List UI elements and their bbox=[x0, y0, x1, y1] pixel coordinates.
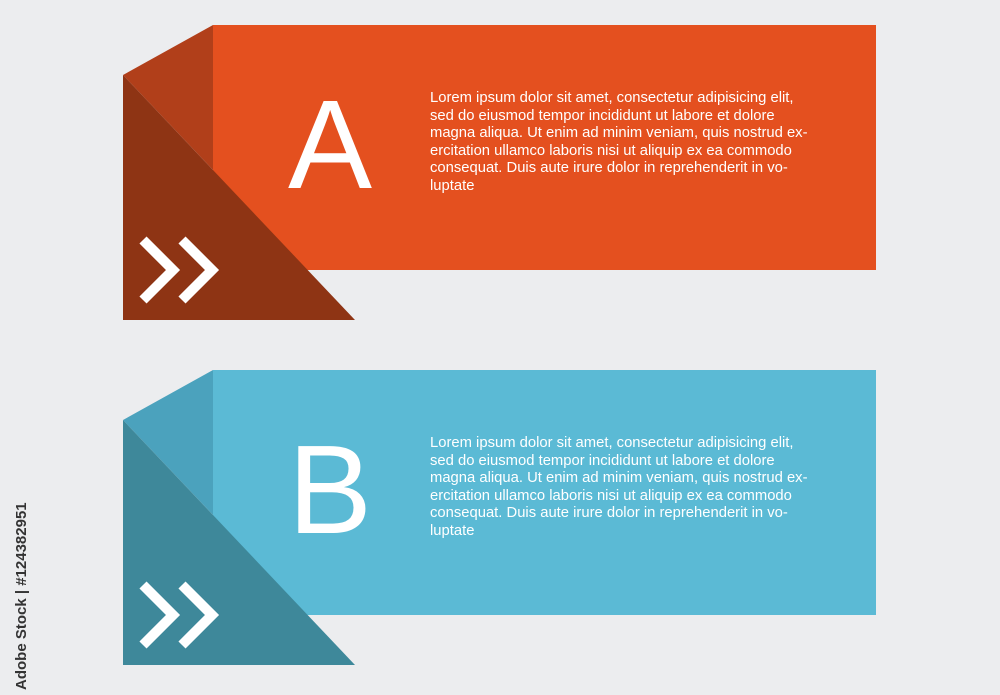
text A: Lorem ipsum dolor sit amet, consectetur adipisicing elit, bbox=[430, 90, 794, 106]
icon: chevrons A bbox=[143, 240, 212, 300]
text A: luptate bbox=[430, 178, 474, 194]
icon: chevrons B bbox=[143, 585, 212, 645]
dark triangle A bbox=[123, 75, 355, 320]
text A: magna aliqua. Ut enim ad minim veniam, quis nostrud ex- bbox=[430, 125, 808, 141]
banner A bbox=[123, 25, 876, 320]
text A bbox=[430, 90, 808, 194]
text B bbox=[430, 435, 808, 539]
letter A: A bbox=[288, 74, 372, 215]
text B: magna aliqua. Ut enim ad minim veniam, quis nostrud ex- bbox=[430, 470, 808, 486]
letter B: B bbox=[288, 419, 372, 560]
text B: ercitation ullamco laboris nisi ut aliquip ex ea commodo bbox=[430, 488, 792, 504]
text B: sed do eiusmod tempor incididunt ut labore et dolore bbox=[430, 453, 775, 469]
text B: luptate bbox=[430, 523, 474, 539]
fold flap B bbox=[123, 370, 213, 515]
watermark id: Adobe Stock | #124382951 bbox=[13, 502, 30, 690]
banner B bbox=[123, 370, 876, 665]
text B: Lorem ipsum dolor sit amet, consectetur adipisicing elit, bbox=[430, 435, 794, 451]
panel B body bbox=[213, 370, 876, 615]
dark triangle B bbox=[123, 420, 355, 665]
text A: ercitation ullamco laboris nisi ut aliquip ex ea commodo bbox=[430, 143, 792, 159]
fold flap A bbox=[123, 25, 213, 170]
panel A body bbox=[213, 25, 876, 270]
text B: consequat. Duis aute irure dolor in reprehenderit in vo- bbox=[430, 505, 788, 521]
text A: sed do eiusmod tempor incididunt ut labore et dolore bbox=[430, 108, 775, 124]
text A: consequat. Duis aute irure dolor in reprehenderit in vo- bbox=[430, 160, 788, 176]
